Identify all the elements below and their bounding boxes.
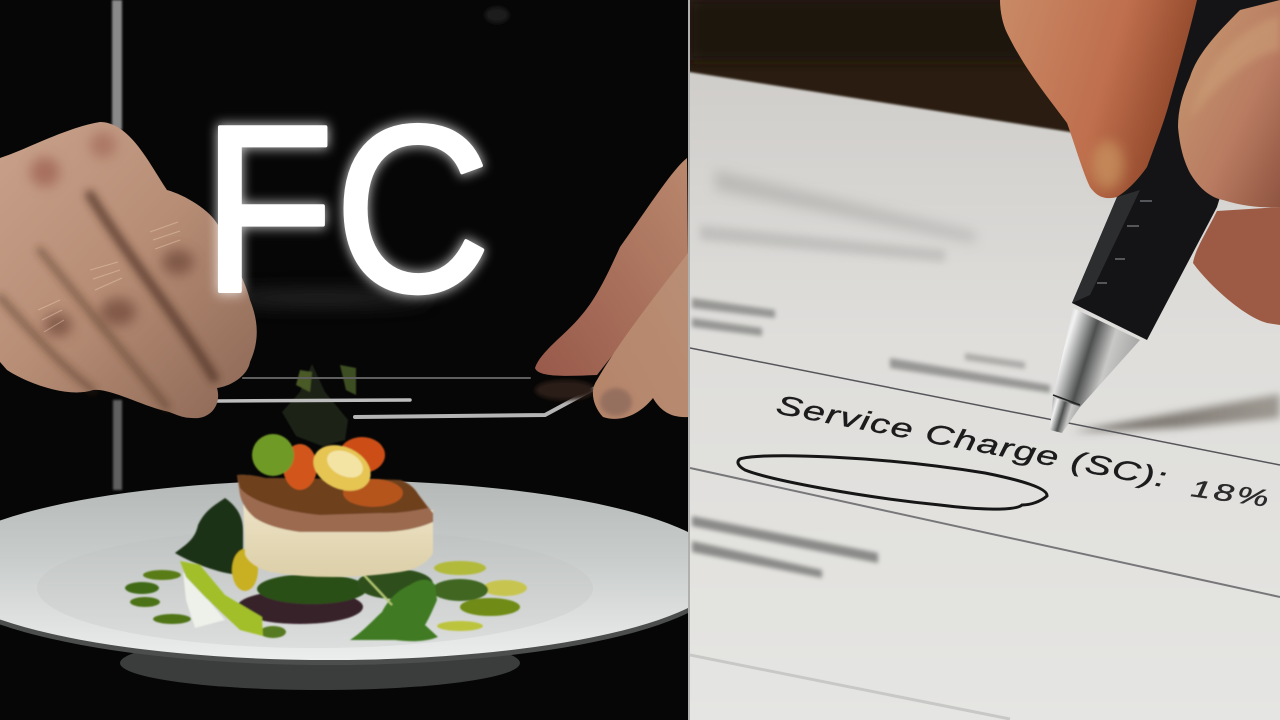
glowing FC letters: FC — [202, 77, 491, 342]
food: layered cake — [237, 475, 433, 577]
tweezers — [217, 378, 595, 417]
blurred form text — [692, 170, 1050, 578]
pen shadow — [1072, 394, 1280, 432]
plate — [0, 480, 725, 690]
coat button — [485, 7, 509, 23]
service charge value: 18% — [1189, 475, 1273, 513]
right hand — [535, 158, 688, 419]
food: garnish — [252, 364, 403, 507]
hand-drawn oval — [738, 456, 1047, 509]
pen — [1050, 0, 1280, 433]
service charge label: Service Charge (SC): — [774, 390, 1170, 494]
paper sheet — [670, 69, 1280, 720]
panel: chef plating dish — [0, 0, 725, 720]
fingers holding pen — [1000, 0, 1280, 325]
divider — [688, 0, 690, 720]
chef coat piping — [112, 0, 122, 490]
form rule lines — [690, 348, 1280, 719]
food: kale — [175, 498, 243, 575]
left hand — [0, 122, 257, 418]
knuckle shadows — [30, 132, 194, 337]
food: sauce and greens — [125, 498, 527, 641]
panel: signing the bill — [670, 0, 1280, 720]
finger gaps — [0, 195, 214, 407]
glowing FC letters: FC — [202, 77, 491, 342]
knuckle creases — [38, 222, 180, 332]
